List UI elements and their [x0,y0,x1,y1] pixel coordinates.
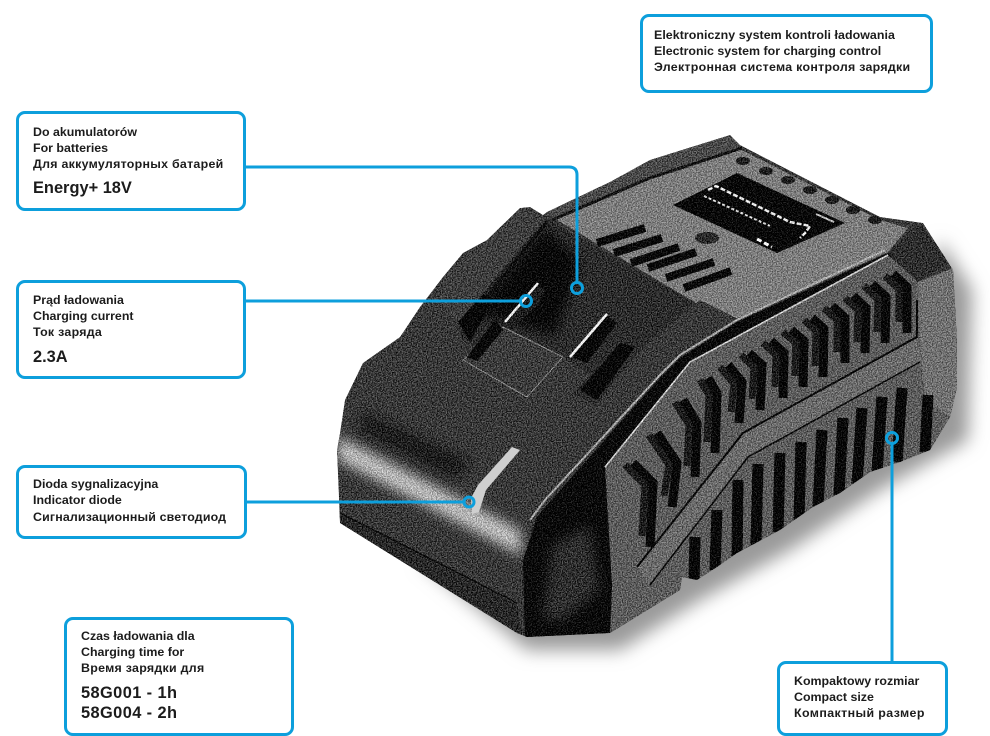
cradle front plate [344,300,738,406]
callout: charging time: Время зарядки для [81,661,204,675]
callout: charging current [16,280,246,379]
callout: indicator diode: Indicator diode [33,493,122,507]
top vent slots [597,228,731,288]
callout: charging time [64,617,294,736]
raised tab [463,327,563,397]
callout: compact size: Compact size [794,690,874,704]
battery cradle [457,219,696,405]
drop shadow [420,240,972,650]
rating label [673,173,845,253]
callout: charging time: Czas ładowania dla [81,629,195,643]
contact slots [458,283,635,400]
right end cap [918,268,960,417]
connector: diode [246,497,474,507]
callout: charging current: Charging current [33,309,134,323]
callout: charging time: 58G004 - 2h [81,704,177,722]
callout: charging time: 58G001 - 1h [81,684,177,702]
lower fins [694,388,928,582]
callout: batteries: For batteries [33,141,108,155]
callout: indicator diode: Dioda sygnalizacyjna [33,477,158,491]
illustration: battery charger [337,135,984,662]
housing silhouette [337,135,957,637]
connector: compact size [886,432,898,661]
upper vent slots [633,274,907,547]
top face [547,145,908,320]
rear ridge [547,135,742,220]
callout: compact size: Kompaktowy rozmiar [794,674,919,688]
left guide rail [443,222,541,324]
callout: charging control: Electronic system for charging control [654,44,881,58]
lower rim band [637,337,922,585]
front face dark band [360,413,470,478]
upper rim highlight [530,250,885,520]
callout: charging current: Ток заряда [33,325,102,339]
callout: batteries: Do akumulatorów [33,125,137,139]
callout: charging control [640,14,933,93]
connector: charging current [245,296,532,306]
vent slot shading [625,276,899,536]
callout: charging control: Elektroniczny system kontroli ładowania [654,28,895,42]
callout: compact size: Компактный размер [794,706,925,720]
front face highlight [337,436,522,556]
callout: charging control: Электронная система контроля зарядки [654,60,910,74]
rear ventilation bumps [736,157,882,224]
indicator diode [471,447,520,514]
screw [695,232,719,244]
callout: batteries: Для аккумуляторных батарей [33,157,224,171]
callout: indicator diode [16,465,247,539]
callout: compact size [777,661,948,736]
callout: batteries [16,111,246,211]
corner block [888,223,950,282]
cradle shadow [468,228,580,335]
callout: batteries: Energy+ 18V [33,179,132,197]
callout: indicator diode: Сигнализационный светодиод [33,510,226,524]
callout: charging current: 2.3A [33,348,68,366]
charger body [337,135,960,640]
callout: charging current: Prąd ładowania [33,293,124,307]
callout: charging time: Charging time for [81,645,184,659]
side panel [605,255,960,636]
connector: batteries [245,167,582,294]
black corner and band [523,253,893,640]
lower lip [337,513,523,640]
